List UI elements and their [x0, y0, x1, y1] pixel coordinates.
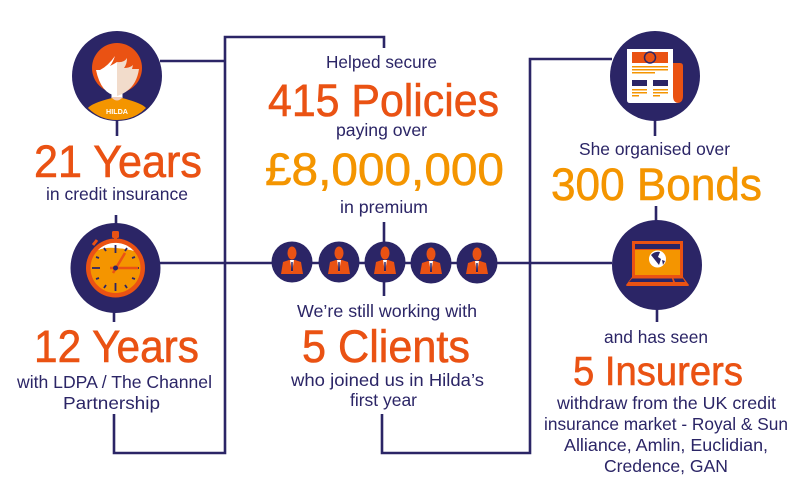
text: withdraw from the UK credit insurance market: Credence, GAN	[604, 456, 728, 476]
heading: 5 Insurers: 5 Insurers	[573, 348, 743, 394]
text: in premium: in premium	[340, 197, 428, 217]
heading: 300 Bonds: 300 Bonds	[551, 159, 762, 210]
text: withdraw from the UK credit insurance market: Alliance, Amlin, Euclidian,	[564, 435, 768, 455]
text: We're still working with: We’re still working with	[297, 301, 477, 321]
text: withdraw from the UK credit insurance market: withdraw from the UK credit	[556, 393, 776, 413]
icon: newspaper	[610, 31, 700, 121]
text: in credit insurance: in credit insurance	[46, 184, 188, 204]
icon: person 4	[410, 242, 452, 284]
heading: 415 Policies: 415 Policies	[268, 75, 499, 126]
icon: person 3	[364, 242, 406, 282]
text: withdraw from the UK credit insurance market: insurance market - Royal & Sun	[544, 414, 788, 434]
icon: person 1	[272, 242, 312, 282]
text: withdraw from the UK credit insurance market	[544, 393, 788, 476]
heading: 21 Years: 21 Years	[34, 136, 202, 187]
icon: stopwatch	[70, 223, 160, 313]
text: who joined us in Hilda's first year: who joined us in Hilda’s	[290, 370, 484, 390]
heading: £8,000,000: £8,000,000	[265, 144, 504, 195]
text: who joined us in Hilda's first year	[290, 370, 484, 410]
icon: person 2	[318, 242, 360, 282]
heading: 5 Clients: 5 Clients	[302, 321, 470, 372]
icon: laptop with globe	[612, 220, 702, 310]
text: paying over: paying over	[336, 120, 427, 140]
text: and has seen: and has seen	[604, 327, 708, 347]
connector lines	[114, 37, 657, 453]
text: with LDPA / The Channel Partnership: Partnership	[63, 393, 160, 413]
label: Hilda: HILDA	[106, 107, 129, 116]
text: Helped secure: Helped secure	[326, 52, 437, 72]
icon: Hilda portrait	[72, 31, 162, 121]
heading: 12 Years: 12 Years	[34, 321, 199, 372]
people icons row	[272, 242, 498, 284]
text: She organised over: She organised over	[579, 139, 730, 159]
text: with LDPA / The Channel Partnership	[16, 372, 212, 413]
text: who joined us in Hilda's first year: first year	[350, 390, 417, 410]
icon: person 5	[456, 242, 498, 284]
text: with LDPA / The Channel Partnership: with LDPA / The Channel	[16, 372, 212, 392]
